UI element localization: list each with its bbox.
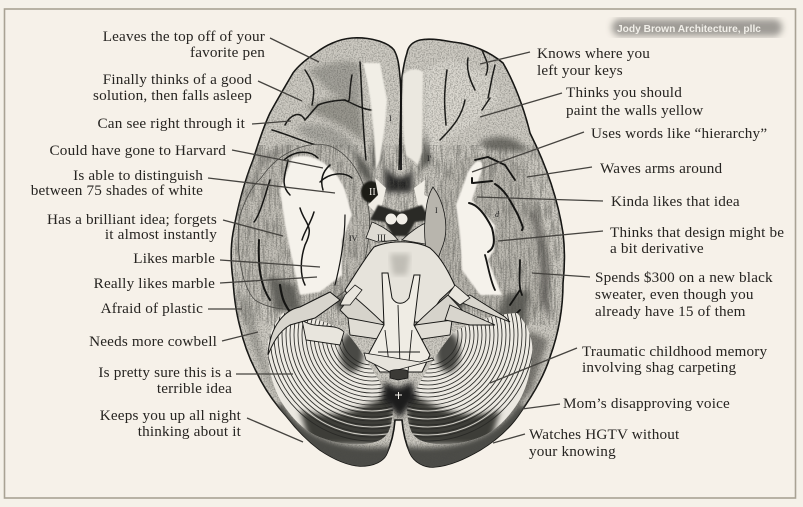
grain overlay bbox=[231, 38, 564, 450]
label: yellow: paint the walls yellow bbox=[566, 102, 703, 119]
anatomical marks: II bbox=[369, 187, 376, 198]
label: plastic: Afraid of plastic bbox=[101, 300, 203, 317]
label: derivative: Thinks that design might be bbox=[610, 224, 784, 241]
label: favorite pen: Leaves the top off of your bbox=[103, 28, 265, 45]
label: favorite pen: favorite pen bbox=[190, 44, 265, 61]
label: keys: left your keys bbox=[537, 62, 623, 79]
temporal lobe left base bbox=[238, 144, 370, 309]
label: shag carpeting: Traumatic childhood memory bbox=[582, 343, 767, 360]
label: really likes marble: Really likes marble bbox=[94, 275, 215, 292]
streak texture on temporal lobes bbox=[235, 145, 560, 325]
label: asleep: Finally thinks of a good bbox=[103, 71, 252, 88]
label: brilliant idea: Has a brilliant idea; forgets bbox=[47, 211, 217, 228]
label: shag carpeting: involving shag carpeting bbox=[582, 359, 736, 376]
occipital dark rim bbox=[276, 400, 526, 467]
cerebellum left bbox=[260, 229, 478, 450]
label: terrible idea: terrible idea bbox=[157, 380, 232, 397]
anatomical marks: IV bbox=[349, 234, 358, 243]
label: mom: Mom’s disapproving voice bbox=[563, 395, 730, 412]
label: keys: Knows where you bbox=[537, 45, 650, 62]
anatomical marks: d bbox=[495, 210, 500, 219]
sulci on temporal lobes bbox=[254, 152, 523, 320]
label: yellow: Thinks you should bbox=[566, 84, 682, 101]
watermark bbox=[612, 19, 782, 36]
label: sweater: already have 15 of them bbox=[595, 303, 746, 320]
label: see through: Can see right through it bbox=[98, 115, 246, 132]
temporal lobe right base bbox=[432, 154, 552, 325]
brain outline and base tone bbox=[231, 38, 564, 467]
dark shading near temporal edges bbox=[268, 210, 549, 328]
brain illustration bbox=[225, 30, 570, 475]
label: sweater: Spends $300 on a new black bbox=[595, 269, 773, 286]
label: terrible idea: Is pretty sure this is a bbox=[98, 364, 232, 381]
label: kinda likes: Kinda likes that idea bbox=[611, 193, 740, 210]
leader lines bbox=[208, 38, 603, 443]
anatomical marks: I bbox=[389, 114, 392, 123]
temporal white area left bbox=[280, 156, 352, 295]
label: HGTV: Watches HGTV without bbox=[529, 426, 679, 443]
label: Harvard: Could have gone to Harvard bbox=[50, 142, 226, 159]
anatomical marks bbox=[349, 114, 500, 243]
tonal shading of frontal lobes bbox=[238, 60, 528, 405]
anatomical marks: I' bbox=[427, 154, 432, 163]
label: hierarchy: Uses words like “hierarchy” bbox=[591, 125, 767, 142]
label: derivative: a bit derivative bbox=[610, 240, 704, 257]
label: asleep: solution, then falls asleep bbox=[93, 87, 252, 104]
olfactory tract strips bbox=[363, 63, 387, 170]
temporal white area right bbox=[456, 161, 502, 295]
label: all night: Keeps you up all night bbox=[100, 407, 241, 424]
label: all night: thinking about it bbox=[138, 423, 242, 440]
label: shades of white: between 75 shades of white bbox=[31, 182, 203, 199]
label: cowbell: Needs more cowbell bbox=[89, 333, 217, 350]
label: likes marble: Likes marble bbox=[133, 250, 215, 267]
central structures bbox=[361, 181, 381, 203]
labels left bbox=[31, 28, 265, 440]
anatomical marks: I bbox=[435, 206, 438, 215]
label: shades of white: Is able to distinguish bbox=[73, 167, 203, 184]
anatomical marks: III bbox=[377, 233, 386, 243]
labels right bbox=[529, 45, 784, 460]
sulci bbox=[272, 50, 495, 160]
label: waves arms: Waves arms around bbox=[600, 160, 723, 177]
label: HGTV: your knowing bbox=[529, 443, 616, 460]
pons and brainstem bbox=[268, 242, 510, 418]
cerebellum right bbox=[322, 229, 540, 450]
label: brilliant idea: it almost instantly bbox=[105, 226, 217, 243]
watermark: Jody Brown Architecture, pllc bbox=[617, 24, 761, 35]
label: sweater: sweater, even though you bbox=[595, 286, 754, 303]
